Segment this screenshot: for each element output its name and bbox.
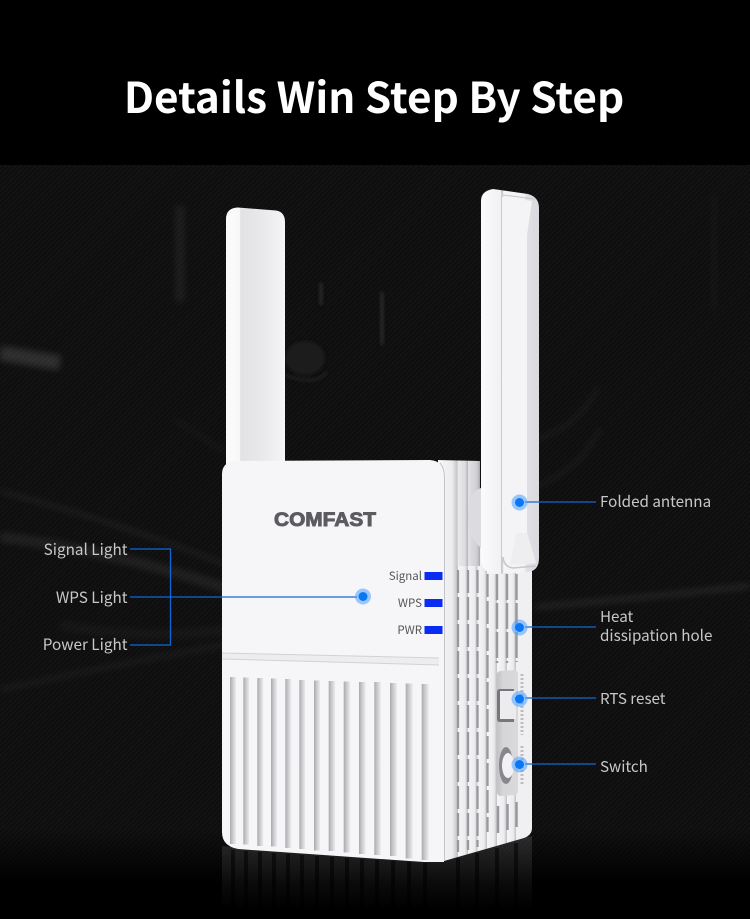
callout: RTS reset: RTS reset (600, 687, 666, 709)
header band (0, 0, 750, 165)
left callout bracket: light labels connected to dot (130, 549, 371, 645)
device front face (222, 460, 444, 862)
callout: Switch: Switch (600, 755, 648, 777)
callout: Heat dissipation hole: Heat (600, 605, 634, 627)
router device (222, 460, 532, 870)
callout: Folded antenna (512, 490, 711, 512)
callout label: Signal Light: Signal Light (44, 538, 128, 560)
callout: RTS reset (512, 687, 666, 709)
callout: Heat dissipation hole (512, 605, 712, 646)
callout label: Power Light: Power Light (43, 633, 128, 655)
LED label: PWR: PWR (397, 622, 422, 638)
LED label: Signal: Signal (389, 568, 422, 584)
LED label: PWR (397, 622, 442, 638)
device reflection (222, 836, 532, 910)
callout label: WPS Light: WPS Light (56, 586, 128, 608)
LED label: Signal (389, 568, 442, 584)
device side with vent fins (438, 460, 532, 870)
front panel seam (222, 653, 439, 665)
side control panel with reset button and power switch (497, 670, 522, 796)
front vent grooves (230, 677, 429, 860)
LED label: WPS: WPS (398, 595, 422, 611)
LED label: WPS (398, 595, 442, 611)
callout: Folded antenna: Folded antenna (600, 490, 711, 512)
callout: Heat dissipation hole: dissipation hole (600, 624, 712, 646)
callout: Switch (512, 755, 648, 777)
left antenna (226, 208, 285, 470)
logo: COMFAST: COMFAST (274, 509, 376, 531)
folded right antenna (481, 189, 539, 574)
title: Details Win Step By Step (124, 65, 624, 126)
antenna hinge (468, 488, 481, 548)
